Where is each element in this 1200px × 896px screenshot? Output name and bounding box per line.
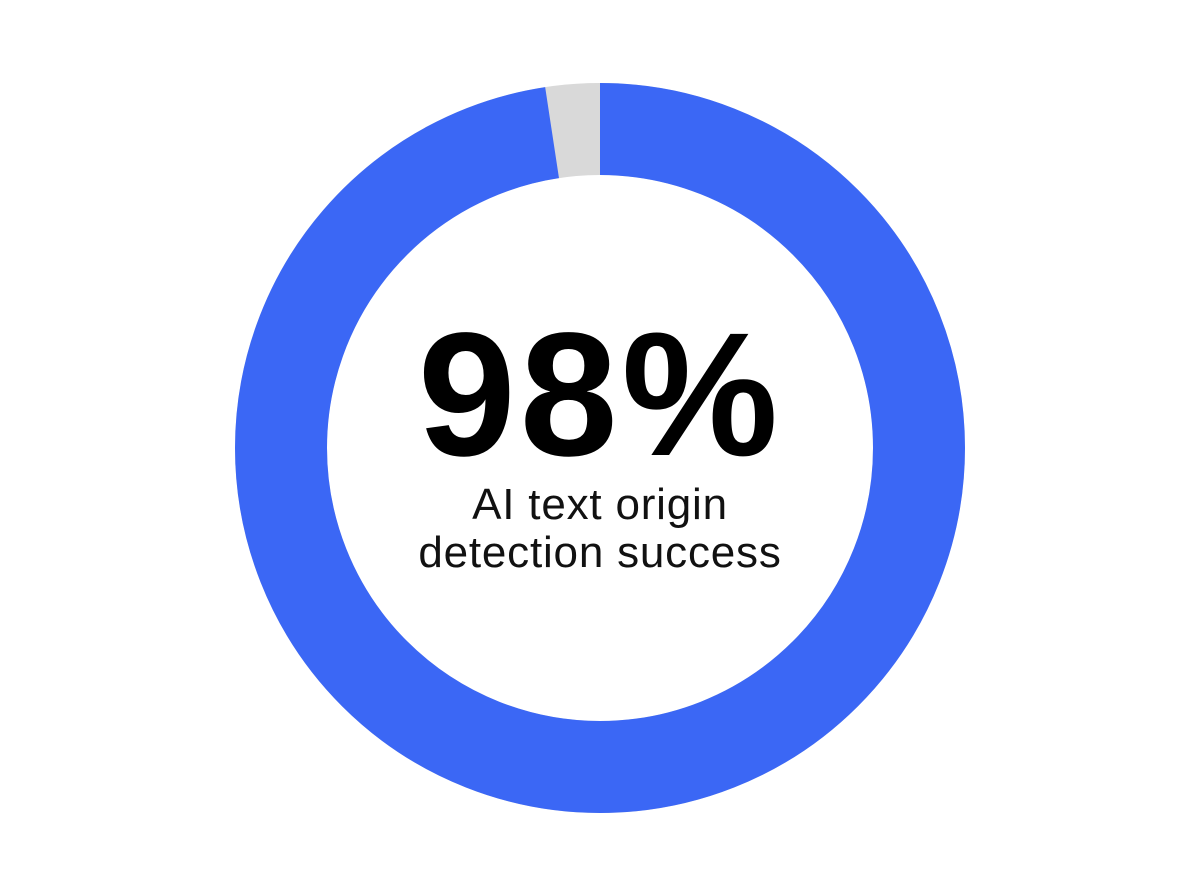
big percentage: 98% — [418, 297, 782, 493]
donut value segment (blue, 98%) — [281, 129, 919, 767]
donut remainder segment (gray) — [281, 129, 919, 767]
caption: AI text origin — [472, 480, 728, 529]
caption: detection success — [418, 528, 782, 577]
caption — [418, 480, 782, 577]
